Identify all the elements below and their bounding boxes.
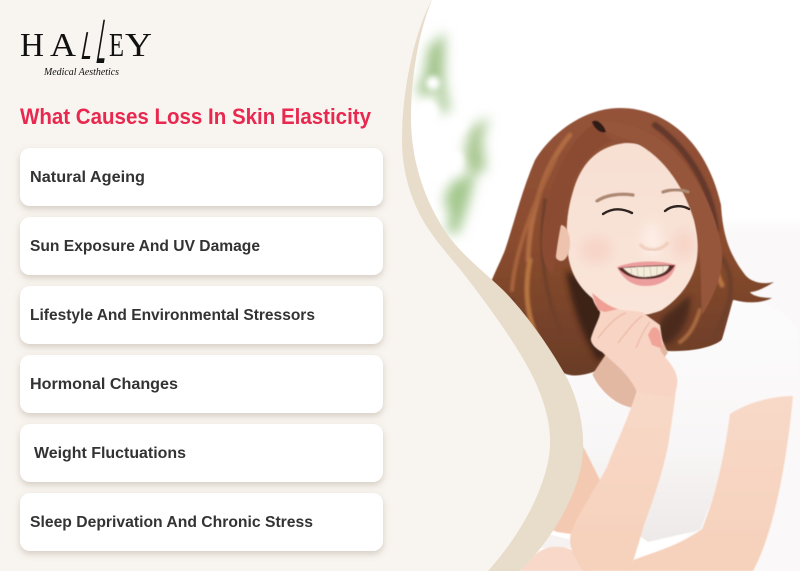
hand under chin xyxy=(591,293,677,397)
card: Lifestyle xyxy=(20,286,383,344)
hair highlights and shadows xyxy=(512,125,731,362)
logo: Halley Medical Aesthetics: Medical Aesthetics xyxy=(43,67,119,78)
card: Weight Fluctuations: Weight Fluctuations xyxy=(34,445,186,462)
face xyxy=(567,143,698,315)
cheek shading xyxy=(580,222,695,263)
hair parting bangs xyxy=(542,121,722,315)
logo: Halley Medical Aesthetics: H xyxy=(20,27,44,64)
logo: Halley Medical Aesthetics: Y xyxy=(125,27,152,64)
eyebrows xyxy=(597,190,688,201)
logo: Halley Medical Aesthetics: E xyxy=(109,27,124,64)
bed sheet at lower left xyxy=(535,532,572,548)
card: Sleep Deprivation xyxy=(20,493,383,551)
card: Sun Exposure: Sun Exposure And UV Damage xyxy=(30,238,260,255)
logo: Halley Medical Aesthetics: L xyxy=(93,6,114,76)
card: Lifestyle: Lifestyle And Environmental Stressors xyxy=(30,307,315,324)
closed eyes xyxy=(603,206,689,214)
decorative beige wave xyxy=(0,0,583,571)
blurred green plant xyxy=(416,32,489,234)
card: Weight Fluctuations xyxy=(20,424,383,482)
card: Sun Exposure xyxy=(20,217,383,275)
neck xyxy=(592,335,668,408)
resting hand on bed xyxy=(520,547,590,571)
far upper arm xyxy=(540,435,601,535)
right arm xyxy=(628,396,793,571)
t-shirt xyxy=(566,300,798,542)
card: Natural Ageing xyxy=(20,148,383,206)
title: What Causes Loss In Skin Elasticity xyxy=(20,104,372,129)
card: Hormonal Changes: Hormonal Changes xyxy=(30,376,178,393)
ear xyxy=(552,225,570,261)
card: Natural Ageing: Natural Ageing xyxy=(30,169,145,186)
smile xyxy=(617,261,676,286)
card: Sleep Deprivation: Sleep Deprivation And Chronic Stress xyxy=(30,514,313,531)
photo: smiling woman xyxy=(400,0,800,571)
logo: Halley Medical Aesthetics: L xyxy=(78,24,97,68)
nose xyxy=(640,242,668,250)
logo: Halley Medical Aesthetics xyxy=(20,6,152,78)
hair back xyxy=(488,108,774,376)
cream left panel xyxy=(0,0,550,571)
forearm xyxy=(570,378,677,571)
card: Hormonal Changes xyxy=(20,355,383,413)
logo: Halley Medical Aesthetics: A xyxy=(50,27,76,64)
